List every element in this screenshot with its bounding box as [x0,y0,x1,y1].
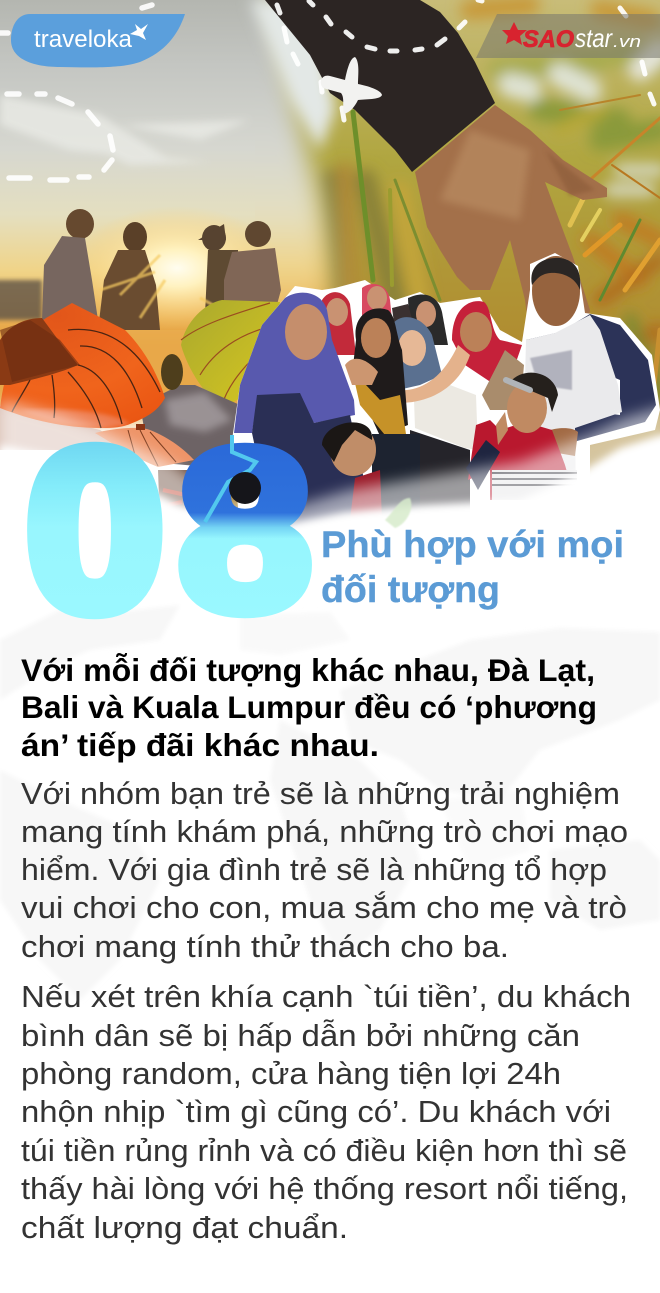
body paragraph two [21,979,631,1245]
icon: red star [502,22,527,45]
hand [415,105,607,314]
big number 08: 0 [26,404,164,658]
heading [321,524,624,610]
icon: paper plane [321,57,382,114]
lead paragraph: Với mỗi đối tượng khác nhau, Đà Lạt, [21,652,595,688]
yellow umbrella [181,300,280,408]
body paragraph two: Nếu xét trên khía cạnh `túi tiền’, du khách [21,979,631,1014]
family group [232,253,660,530]
friend one [42,209,98,320]
setting sun glow [102,211,248,322]
white sticker outline [232,253,660,530]
man in raglan shirt [525,256,656,470]
shrub [161,354,183,390]
body paragraph two: thấy hài lòng với hệ thống resort nổi tiếng, [21,1171,628,1206]
rocky grey cloud [142,385,238,466]
body paragraph one: Với nhóm bạn trẻ sẽ là những trải nghiệm [21,776,620,811]
small orange umbrella [95,424,194,467]
fog over bottom of the photo [0,392,660,530]
heading: đối tượng [321,569,500,610]
big number 08: 8 [178,404,312,658]
body paragraph two: túi tiền rủng rỉnh và có điều kiện hơn thì sẽ [21,1133,627,1168]
camera clip [229,472,261,504]
dark sleeve [265,0,495,172]
body paragraph one: vui chơi cho con, mua sắm cho mẹ và trò [21,890,627,925]
body paragraph one: hiểm. Với gia đình trẻ sẽ là những tổ hợp [21,852,607,887]
body paragraph one [21,776,628,964]
friend four [224,221,281,302]
grey band under umbrella [0,405,112,450]
body paragraph two: chất lượng đạt chuẩn. [21,1210,348,1245]
grass background [230,0,660,530]
dashed flight path left [0,5,152,180]
big number 08 [26,404,312,658]
small pale flower [385,498,411,528]
sleeve dashes [277,0,654,120]
lead paragraph: Bali và Kuala Lumpur đều có ‘phương [21,689,597,725]
body paragraph two: bình dân sẽ bị hấp dẫn bởi những căn [21,1018,580,1053]
lead paragraph: án’ tiếp đãi khác nhau. [21,727,379,763]
woman in yellow and black hijab [345,308,410,514]
girl with blue hair [394,317,477,510]
hero photo collage [0,0,660,560]
SAOstar logo: star [575,23,613,53]
woman in purple hijab [234,293,375,530]
body paragraph two: nhộn nhịp `tìm gì cũng có’. Du khách với [21,1094,611,1129]
heading: Phù hợp với mọi [321,524,624,565]
Traveloka logo badge: traveloka [34,26,133,53]
woman in red hijab [452,301,524,410]
body paragraph one: chơi mang tính thử thách cho ba. [21,929,509,964]
SAOstar logo [476,14,660,58]
body paragraph two: phòng random, cửa hàng tiện lợi 24h [21,1056,561,1091]
dark photo strip between digits [158,470,187,512]
body paragraph one: mang tính khám phá, những trò chơi mạo [21,814,628,849]
strap detail on the eight [205,435,256,522]
silhouette friends at sunset [42,209,281,330]
sky with clouds [0,0,335,420]
lead paragraph [21,652,597,763]
SAOstar logo: SAO [523,26,574,53]
boy in front [322,422,382,520]
SAOstar logo: .vn [613,32,641,51]
boy in red polo [466,373,577,500]
friend three [198,224,238,308]
faint world map [0,605,660,1000]
friend two [98,222,160,330]
back row relatives [322,284,448,355]
icon: bird [130,24,148,40]
big orange umbrella [0,303,165,428]
Traveloka logo badge [11,14,185,67]
